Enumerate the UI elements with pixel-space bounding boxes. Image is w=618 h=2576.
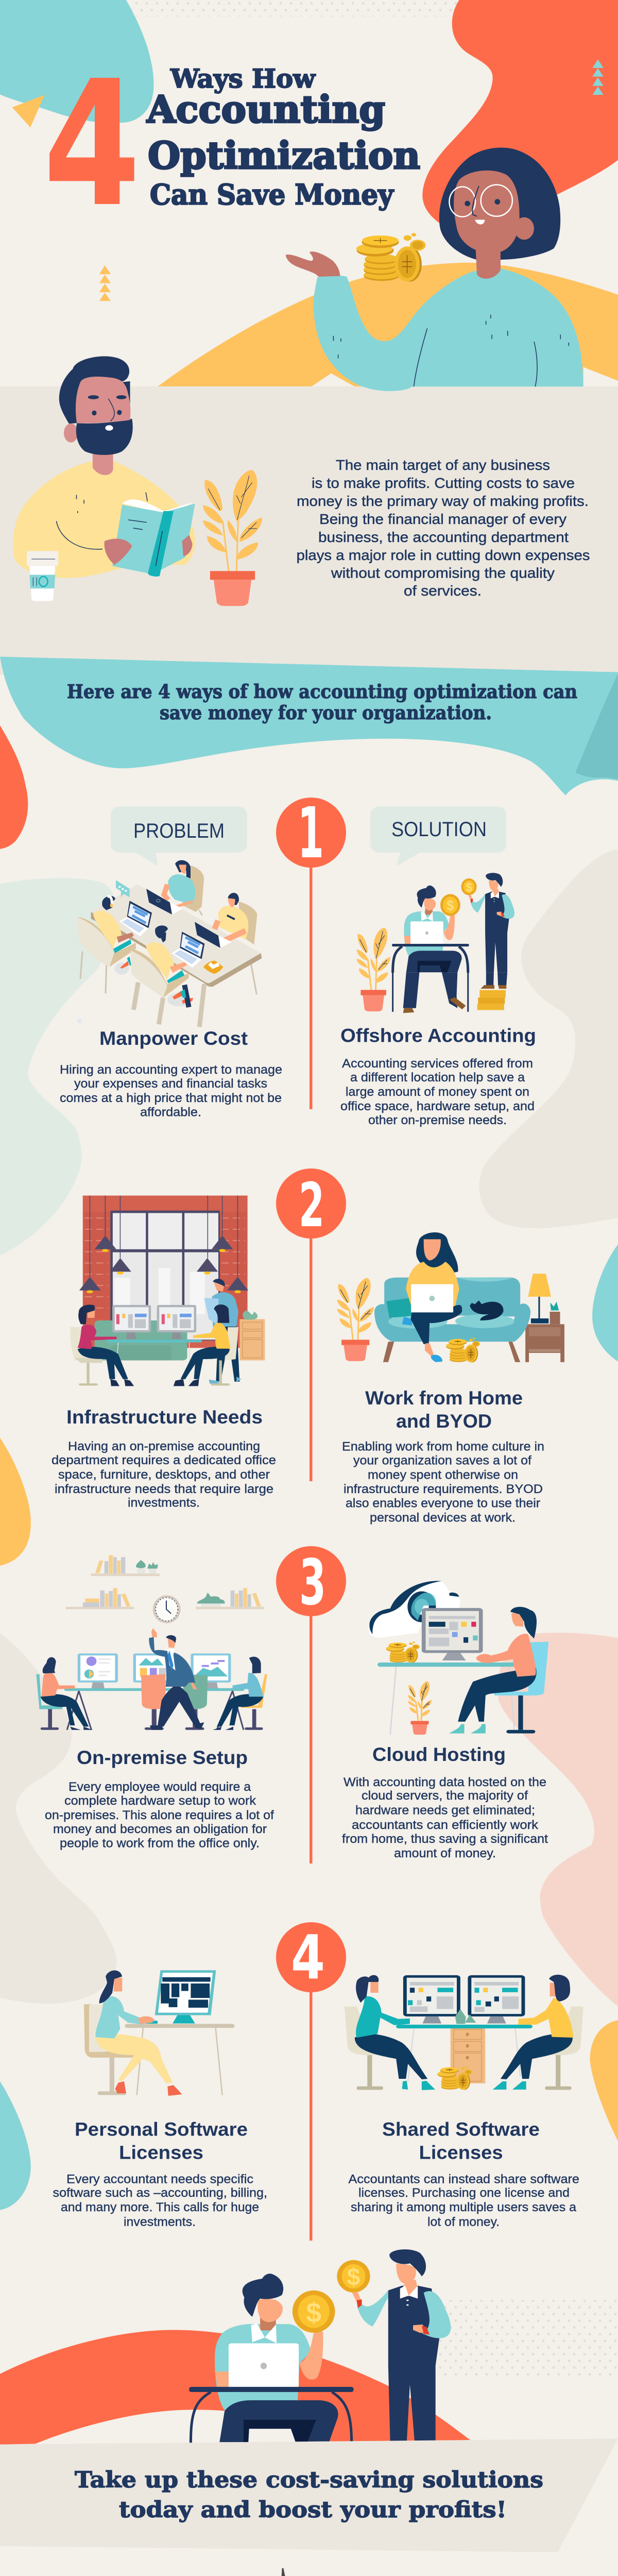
standing man [204,1279,241,1384]
text block: introduction: without compromising the quality [331,565,555,581]
heading: here are 4 ways: Here are 4 ways of how accounting optimization can [67,681,577,703]
heading and text: infrastructure needs: Having an on-premise accounting [68,1439,260,1453]
heading and text: personal software licenses: Licenses [119,2142,203,2163]
heading and text: offshore accounting: large amount of money spent on [346,1085,529,1099]
heading and text: offshore accounting: a different location help save a [350,1071,525,1084]
illustration: cloud hosting [369,1581,548,1735]
text block: introduction [297,457,590,599]
illustration: offshore accountants [357,873,514,1013]
left seated employee [36,1657,93,1730]
heading and text: offshore accounting [340,1025,536,1127]
heading and text: manpower cost: Manpower Cost [99,1028,248,1049]
chairs [141,1674,208,1730]
chairs [345,2006,583,2090]
heading and text: shared software licenses: sharing it among multiple users saves a [351,2200,577,2214]
text block: introduction: The main target of any business [336,457,550,473]
heading and text: work from home [342,1387,544,1525]
heading and text: infrastructure needs: department requires a dedicated office [52,1453,276,1467]
timeline: number 3: 3 [299,1546,326,1619]
title: Optimization [148,133,420,177]
title: Accounting [146,88,385,131]
illustration: woman with coins [286,147,583,391]
heading and text: personal software licenses: Personal Software [75,2119,248,2140]
title: Ways How [170,63,316,94]
background blobs: section 2 and 3 [0,1244,618,1566]
cabinet [451,2028,485,2083]
timeline: number 1 [276,793,346,1109]
icon: coin stack [437,2066,472,2090]
heading and text: personal software licenses: investments. [124,2215,196,2229]
left seated woman [70,1304,134,1386]
woman with laptop [402,1232,462,1362]
heading: here are 4 ways [67,681,577,724]
illustration: on-premise office [36,1555,267,1730]
heading and text: infrastructure needs: space, furniture, desktops, and other [58,1468,270,1482]
heading and text: cloud hosting: accountants can efficiently work [352,1818,539,1832]
callout: problem: PROBLEM [133,820,225,842]
illustration: personal software licence desk [84,1970,234,2096]
heading and text: shared software licenses: Shared Software [382,2119,540,2140]
heading and text: work from home: personal devices at work. [370,1511,516,1525]
monitor [125,1970,234,2095]
heading and text: manpower cost: affordable. [140,1106,201,1119]
heading and text: cloud hosting [342,1744,548,1860]
heading and text: cloud hosting: cloud servers, the majority of [362,1789,528,1803]
icon: coin stack [446,1337,480,1363]
heading and text: personal software licenses: software such as –accounting, billing, [53,2186,267,2200]
heading and text: personal software licenses: and many more. This calls for huge [61,2200,259,2214]
icon: coffee cup [27,551,58,601]
seated woman [95,1970,182,2096]
heading and text: offshore accounting: Accounting services offered from [342,1057,533,1071]
heading and text: work from home: also enables everyone to use their [346,1496,540,1511]
big numeral 4: 4 [43,44,141,245]
heading and text: personal software licenses [53,2119,267,2229]
icon: potted plant [203,470,262,606]
timeline: number 4: 4 [291,1922,325,1993]
panel: closing band with business men [0,2249,618,2552]
seated woman [449,1607,548,1733]
heading: here are 4 ways: save money for your organization. [160,702,492,724]
heading and text: cloud hosting: hardware needs get eliminated; [355,1803,535,1818]
heading and text: shared software licenses: licenses. Purchasing one license and [358,2186,570,2200]
heading and text: infrastructure needs: infrastructure needs that require large [55,1482,273,1496]
heading and text: cloud hosting: amount of money. [394,1846,496,1860]
heading and text: on-premise setup [45,1747,274,1851]
heading and text: shared software licenses: Accountants can instead share software [348,2173,579,2187]
heading and text: work from home: Enabling work from home culture in [342,1439,544,1454]
heading and text: manpower cost: your expenses and financial tasks [74,1077,267,1091]
illustration: man with laptop and man with coin [189,2249,451,2443]
panel: intro band [0,386,618,675]
illustration: work from home on sofa [337,1232,564,1363]
closing call to action: Take up these cost-saving solutions [75,2467,543,2493]
left woman [355,1975,435,2090]
heading and text: offshore accounting: office space, hardware setup, and [340,1099,535,1113]
right woman [493,1975,574,2090]
heading and text: work from home: money spent otherwise on [368,1468,518,1482]
callout: solution [370,806,506,866]
illustration: shared software desk [345,1975,583,2090]
right seated employee [213,1657,267,1730]
timeline: number 3 [276,1546,346,1863]
callout: problem [111,806,247,866]
icon: cat [470,1300,503,1320]
heading and text: on-premise setup: On-premise Setup [77,1747,248,1768]
background blobs: section 4 [0,2020,618,2210]
text block: introduction: plays a major role in cutting down expenses [297,547,590,563]
heading and text: manpower cost: Hiring an accounting expert to manage [60,1063,282,1077]
heading and text: cloud hosting: Cloud Hosting [372,1744,506,1765]
timeline: number 2: 2 [299,1170,324,1241]
chair [84,2004,134,2095]
timeline: number 1: 1 [298,793,324,874]
heading and text: shared software licenses: Licenses [419,2142,503,2163]
desk and monitors [64,1653,244,1730]
heading and text: shared software licenses [348,2119,579,2229]
heading and text: on-premise setup: people to work from the office only. [60,1836,260,1851]
text block: introduction: is to make profits. Cutting costs to save [312,475,575,491]
icon: coin stack [356,233,426,282]
icon: coin pile [477,990,506,1010]
timeline: number 4 [276,1922,346,2241]
panel: hero background shapes [0,0,618,386]
panel: teal banner and side blob [0,657,618,849]
heading and text: offshore accounting: other on-premise needs. [368,1113,507,1127]
footer band [0,2438,618,2552]
icon: potted plant [408,1681,432,1735]
heading and text: personal software licenses: Every accountant needs specific [66,2173,253,2187]
right seated woman [174,1304,238,1386]
monitors [396,1975,533,2081]
heading and text: cloud hosting: from home, thus saving a significant [342,1832,548,1846]
orange arc [0,2330,471,2445]
heading and text: on-premise setup: on-premises. This alone requires a lot of [45,1808,274,1822]
title [43,44,420,245]
timeline: number 2 [276,1168,346,1481]
illustration: office infrastructure [70,1196,265,1386]
heading and text: work from home: and BYOD [396,1411,492,1432]
heading and text: infrastructure needs: investments. [128,1496,200,1510]
closing call to action: today and boost your profits! [119,2497,507,2523]
text block: introduction: money is the primary way of making profits. [297,493,589,509]
heading and text: on-premise setup: money and becomes an obligation for [53,1822,267,1836]
closing call to action [75,2467,543,2523]
illustration: bearded man reading with plant [13,357,262,606]
icon: cloud with gear [369,1581,460,1638]
icon: lamp [528,1274,560,1324]
text block: introduction: of services. [404,583,482,599]
heading and text: shared software licenses: lot of money. [427,2215,500,2229]
heading and text: work from home: Work from Home [365,1387,523,1409]
heading and text: work from home: infrastructure requirements. BYOD [344,1482,543,1496]
text block: introduction: Being the financial manager of every [319,511,566,527]
callout: solution: SOLUTION [391,818,487,841]
title: Can Save Money [150,178,394,211]
illustration: team at table [77,860,262,1027]
heading and text: infrastructure needs [52,1406,276,1510]
monitors [107,1305,202,1377]
icon: coin stack [386,1641,420,1663]
text block: introduction: business, the accounting department [318,529,569,545]
heading and text: on-premise setup: Every employee would require a [68,1780,251,1794]
shelves and clock [66,1555,264,1623]
heading and text: cloud hosting: With accounting data hosted on the [344,1775,546,1789]
heading and text: offshore accounting: Offshore Accounting [340,1025,536,1046]
heading and text: infrastructure needs: Infrastructure Needs [66,1406,263,1428]
monitor [377,1608,516,1735]
heading and text: manpower cost [60,1028,282,1119]
background blobs: section 3 and 4 [0,1633,618,2006]
background blobs: section 1 and 2 [0,849,618,1256]
heading and text: work from home: your organization saves a lot of [353,1454,531,1468]
presenter [149,1628,204,1730]
heading and text: on-premise setup: complete hardware setup to work [64,1794,256,1808]
logo: Ace Cloud Hosting [263,2568,365,2576]
heading and text: manpower cost: comes at a high price that might not be [60,1091,282,1105]
